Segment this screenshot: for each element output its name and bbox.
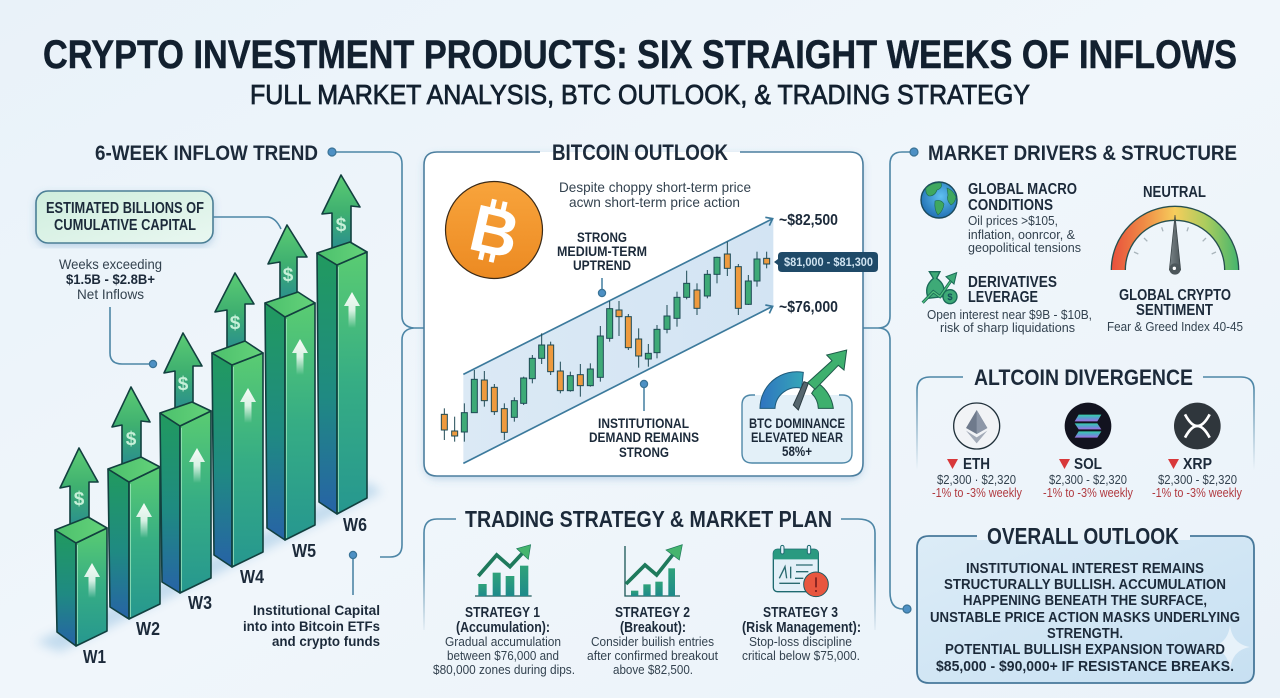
gauge: sentiment [1118,213,1232,275]
heading: overall outlook: OVERALL OUTLOOK [987,523,1179,549]
icon: solana [1065,403,1111,449]
icon: bitcoin coin [446,182,542,278]
text: global macro: CONDITIONS [968,197,1053,214]
heading: bitcoin outlook: BITCOIN OUTLOOK [552,140,728,165]
label: institutional demand: STRONG [619,444,669,460]
text: global sentiment [1107,287,1243,334]
text: outlook summary: $85,000 - $90,000+ IF RESISTANCE BREAKS. [936,659,1234,675]
icon: xrp [1174,403,1221,449]
label: institutional demand: INSTITUTIONAL [598,415,689,431]
text: strategy 2: Consider builish entries [591,634,714,649]
panel: overall outlook [917,523,1254,683]
text: derivatives leverage: LEVERAGE [968,289,1038,306]
label: strong uptrend: STRONG [577,229,627,245]
text: strategy 3 [742,605,861,663]
bar W6: $ [336,215,347,236]
text: global sentiment: GLOBAL CRYPTO [1119,287,1231,304]
text: institutional capital [243,602,380,649]
callout line: institutional capital [349,551,357,595]
text: strategy 3: (Risk Management): [742,620,861,636]
bar W4: $ [230,313,241,334]
badge: btc dominance: BTC DOMINANCE [749,416,845,431]
text: derivatives leverage: Open interest near $9B - $10B, [927,307,1092,322]
text: derivatives leverage: DERIVATIVES [968,274,1057,291]
week labels: W4 [240,567,264,587]
heading: altcoin divergence: ALTCOIN DIVERGENCE [974,365,1193,390]
text: strategy 2 [587,605,718,677]
decorative sparkle [1210,625,1250,670]
bar W3: $ [178,374,189,395]
text: derivatives leverage [927,274,1092,335]
week labels: W6 [343,515,367,535]
text: global macro [968,181,1081,255]
label: strong uptrend: UPTREND [573,257,631,273]
week labels: W3 [188,593,212,613]
candlestick chart: uptrend channel [441,217,773,463]
text: sol: $2,300 - $2,320 [1049,473,1127,487]
text: xrp: -1% to -3% weekly [1152,486,1243,500]
text: global macro: GLOBAL MACRO [968,181,1077,198]
bar W3 [160,333,211,593]
text: outlook summary [930,561,1240,675]
marker: uptrend pointer [598,278,606,297]
connector: right bracket [863,148,918,613]
icon: strategy 1 chart [475,545,532,596]
text: sol: SOL [1074,456,1102,473]
text: global macro: geopolitical tensions [968,240,1081,255]
text: sol [1043,456,1134,500]
text: strategy 1: (Accumulation): [456,620,550,636]
text: intro [559,179,751,210]
label: institutional demand: DEMAND REMAINS [589,429,699,445]
heading: market drivers: MARKET DRIVERS & STRUCTURE [928,142,1237,165]
text: weeks exceeding: $1.5B - $2.8B+ [66,271,155,287]
panel: altcoin divergence [917,365,1254,500]
icon: derivatives leverage: $ [947,292,953,302]
connector: left bracket [328,148,424,557]
callout line: weeks [110,307,157,368]
text: outlook summary: STRUCTURALLY BULLISH. ACCUMULATION [944,577,1226,593]
panel: market drivers [921,142,1243,335]
text: weeks exceeding: Net Inflows [77,286,144,302]
text: eth: $2,300 · $2,320 [937,473,1016,487]
text: eth: -1% to -3% weekly [932,486,1023,500]
bar W6 [317,175,367,514]
text: strategy 1: Gradual accumulation [445,634,561,649]
week labels: W1 [83,647,106,667]
panel: trading strategy [424,506,875,677]
bar chart: weekly inflows [36,175,382,652]
text: outlook summary: HAPPENING BENEATH THE SURFACE, [963,593,1207,609]
text: xrp [1152,456,1243,500]
text: weeks exceeding [59,256,162,302]
bar W5 [265,225,315,540]
text: global macro: Oil prices >$105, [968,213,1058,228]
text: eth [932,456,1023,500]
text: institutional capital: into into Bitcoin ETFs [243,618,380,634]
text: strategy 1: $80,000 zones during dips. [433,662,575,677]
week labels [83,515,367,667]
icon: dominance gauge [760,350,847,410]
icon: globe [921,182,957,218]
text: institutional capital: Institutional Capital [253,602,380,618]
text: global macro: inflation, oonrcor, & [968,227,1075,242]
text: strategy 2: (Breakout): [620,620,686,636]
icon: strategy 2 chart [625,545,682,596]
label: institutional demand [589,415,699,460]
price label: upper: ~$82,500 [779,212,838,229]
heading: trading strategy: TRADING STRATEGY & MARKET PLAN [465,506,832,532]
panel: bitcoin outlook [424,140,878,476]
bar W2: $ [126,429,137,450]
text: strategy 2: above $82,500. [613,662,693,677]
text: strategy 1: between $76,000 and [447,648,559,663]
text: strategy 1: STRATEGY 1 [465,605,540,621]
text: weeks exceeding: Weeks exceeding [59,256,162,272]
callout: estimated billions [36,191,213,243]
text: global sentiment: SENTIMENT [1136,302,1213,319]
text: sol: -1% to -3% weekly [1043,486,1134,500]
text: intro: acwn short-term price action [569,194,740,210]
text: global sentiment: Fear & Greed Index 40-45 [1107,319,1243,334]
label: neutral: NEUTRAL [1143,184,1206,201]
price pill: current range [774,252,878,272]
text: strategy 3: Stop-loss discipline [749,634,852,649]
bar W4 [212,273,263,567]
text: strategy 1 [433,605,575,677]
text: strategy 2: after confirmed breakout [587,648,718,663]
icon: ethereum [954,403,1000,449]
text: derivatives leverage: risk of sharp liquidations [940,320,1075,335]
text: xrp: XRP [1183,456,1212,473]
text: xrp: $2,300 - $2,320 [1158,473,1237,487]
text: intro: Despite choppy short-term price [559,179,751,195]
badge: btc dominance [742,350,852,463]
icon: bitcoin coin: B [463,190,526,273]
bar W1 [55,448,107,646]
text: outlook summary: UNSTABLE PRICE ACTION MASKS UNDERLYING [930,610,1240,626]
text: outlook summary: STRENGTH. [1047,626,1123,642]
heading: 6-week inflow trend: 6-WEEK INFLOW TREND [95,142,318,165]
text: eth: ETH [963,456,990,473]
text: institutional capital: and crypto funds [272,633,380,649]
badge: btc dominance: 58%+ [782,444,812,459]
marker: demand pointer [640,380,648,411]
text: outlook summary: INSTITUTIONAL INTEREST REMAINS [966,561,1204,577]
text: strategy 3: critical below $75,000. [742,648,860,663]
price pill: current range: $81,000 - $81,300 [784,257,873,269]
callout: estimated billions: ESTIMATED BILLIONS OF [46,200,204,217]
text: strategy 2: STRATEGY 2 [615,605,690,621]
badge: btc dominance: ELEVATED NEAR [751,430,843,445]
label: strong uptrend [557,229,647,273]
icon: derivatives leverage [923,272,957,304]
week labels: W5 [292,541,316,561]
week labels: W2 [136,619,160,639]
text: strategy 3: STRATEGY 3 [763,605,838,621]
callout: estimated billions: CUMULATIVE CAPITAL [54,217,196,234]
bar W1: $ [74,489,85,510]
text: outlook summary: POTENTIAL BULLISH EXPANSION TOWARD [945,642,1225,658]
price label: lower: ~$76,000 [779,299,838,316]
subtitle: FULL MARKET ANALYSIS, BTC OUTLOOK, & TRADING STRATEGY [250,79,1030,110]
icon: strategy 3 calendar alert [773,545,828,597]
bar W5: $ [283,265,294,286]
bar W2 [108,387,160,619]
label: strong uptrend: MEDIUM-TERM [557,243,647,259]
